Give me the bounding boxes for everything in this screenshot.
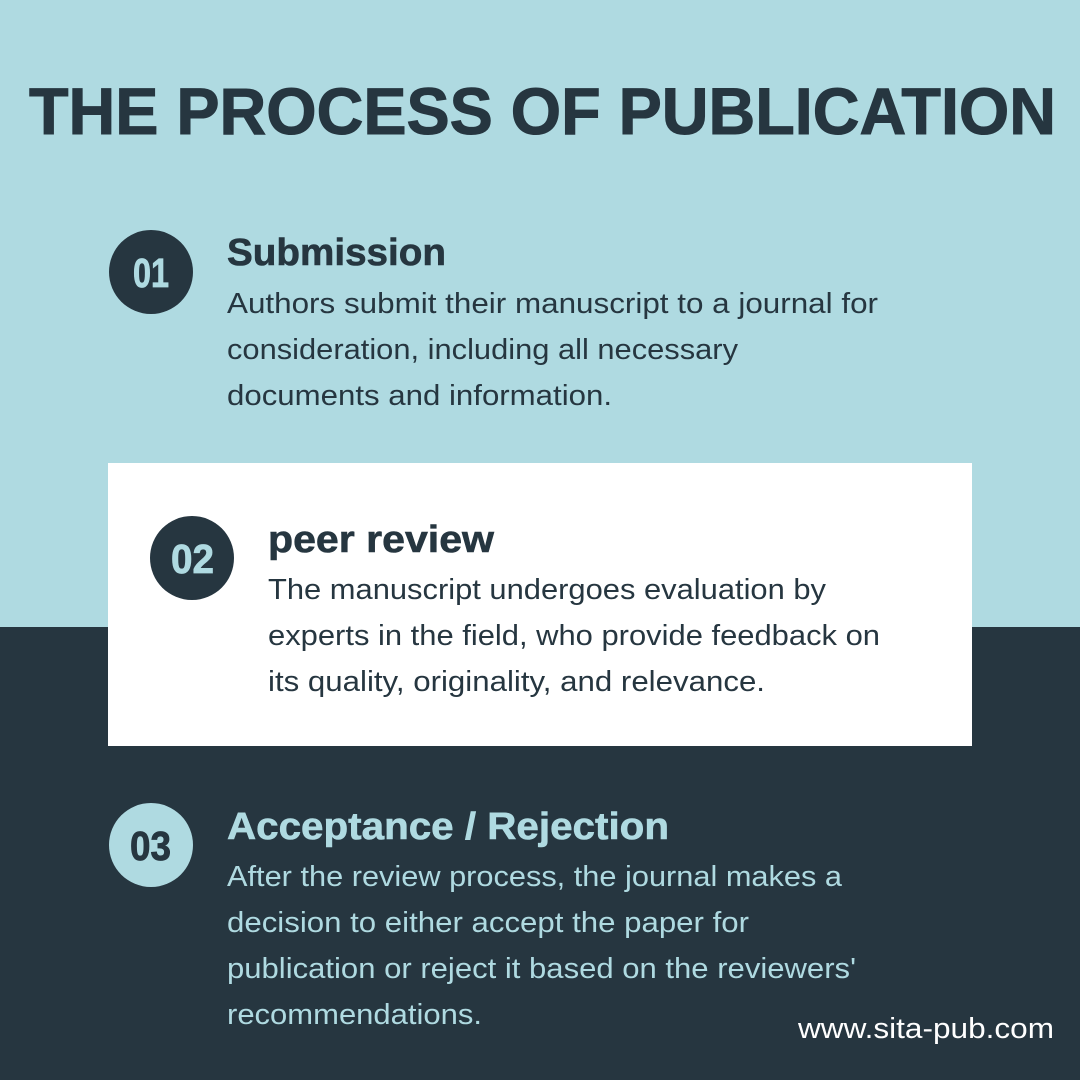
text block: submission description: documents and information.	[227, 380, 612, 412]
text block: acceptance description: decision to either accept the paper for	[227, 907, 749, 939]
text block: submission description	[227, 288, 878, 412]
heading: acceptance / rejection: Acceptance / Rejection	[227, 806, 669, 848]
panel: step 2 peer review	[108, 463, 972, 746]
icon: number badge 01: 01	[133, 250, 169, 296]
step 1: submission	[109, 230, 878, 412]
heading: peer review: peer review	[268, 519, 494, 561]
panel background	[108, 463, 972, 746]
text block: submission description: Authors submit their manuscript to a journal for	[227, 288, 878, 320]
text block: acceptance description: publication or reject it based on the reviewers'	[227, 953, 856, 985]
text block: peer review description: The manuscript undergoes evaluation by	[268, 574, 827, 606]
text block: peer review description: its quality, originality, and relevance.	[268, 666, 765, 698]
text block: acceptance description: recommendations.	[227, 999, 482, 1031]
icon: number badge 03: 03	[130, 823, 171, 869]
step 3: acceptance or rejection	[109, 803, 856, 1031]
text block: peer review description	[268, 574, 880, 698]
text block: submission description: consideration, including all necessary	[227, 334, 739, 366]
text block: acceptance description	[227, 861, 856, 1031]
background: light top band	[0, 0, 1080, 627]
icon: number badge 01	[109, 230, 193, 314]
text block: acceptance description: After the review process, the journal makes a	[227, 861, 843, 893]
title: THE PROCESS OF PUBLICATION	[29, 74, 1056, 148]
text block: peer review description: experts in the field, who provide feedback on	[268, 620, 880, 652]
background: dark bottom band	[0, 627, 1080, 1080]
icon: number badge 02	[150, 516, 234, 600]
website url: www.sita-pub.com	[797, 1013, 1054, 1045]
icon: number badge 02: 02	[171, 536, 214, 582]
icon: number badge 03	[109, 803, 193, 887]
heading: submission: Submission	[227, 232, 446, 274]
